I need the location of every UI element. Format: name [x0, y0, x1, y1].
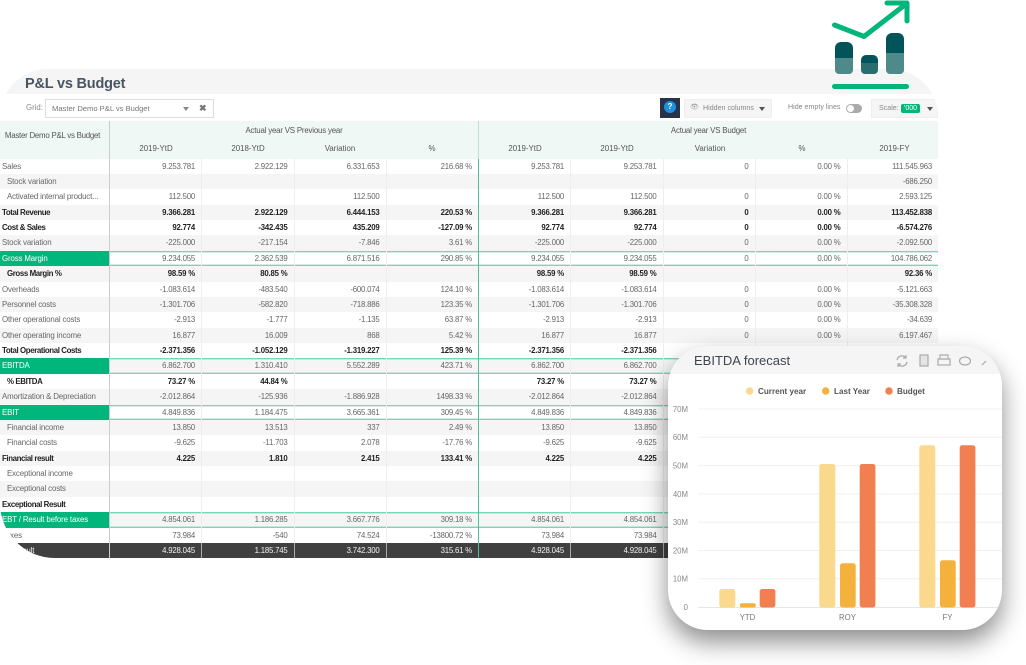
- table body: 92.774: [172, 223, 195, 232]
- table body: -225.000: [166, 238, 195, 247]
- table body: 2.078: [361, 438, 380, 447]
- table body: 9.234.055: [162, 254, 195, 263]
- icon: rising bar chart with arrow: [832, 0, 910, 89]
- table body: -2.913: [174, 315, 195, 324]
- table body: Cost & Sales: [2, 223, 45, 232]
- table body: -127.09 %: [438, 223, 472, 232]
- table body: 4.225: [638, 454, 656, 463]
- table body: 290.85 %: [441, 254, 472, 263]
- table body: 0: [744, 192, 748, 201]
- table body: Exceptional Result: [2, 500, 65, 509]
- table body: -1.083.614: [529, 284, 564, 294]
- table body: 104.786.062: [891, 254, 932, 263]
- table body: 0.00 %: [817, 254, 840, 263]
- table body: 9.234.055: [531, 254, 564, 263]
- table body: 3.667.776: [347, 515, 380, 524]
- table body: EBT / Result before taxes: [2, 515, 88, 524]
- table body: -600.074: [350, 284, 380, 294]
- table body: 9.253.781: [162, 162, 195, 170]
- table body: -9.625: [174, 438, 195, 447]
- x axis labels: YTD: [740, 613, 756, 622]
- table body: 1.810: [269, 454, 288, 463]
- table header: 2019-YtD: [600, 144, 634, 153]
- header icons: [896, 354, 986, 367]
- table body: 73.27 %: [168, 377, 195, 386]
- table header: Variation: [695, 144, 725, 153]
- table body: Stock variation: [2, 238, 52, 247]
- y axis labels: [673, 405, 689, 612]
- table body: 73.984: [634, 530, 656, 540]
- legend: Budget: [897, 387, 925, 396]
- table body: 6.862.700: [531, 361, 564, 370]
- table body: 0: [744, 254, 748, 263]
- x axis labels: FY: [943, 613, 953, 622]
- table body: 0: [744, 238, 748, 247]
- y axis labels: 0: [684, 603, 689, 612]
- table body: -2.012.864: [621, 392, 656, 401]
- table body: -1.886.928: [344, 392, 380, 401]
- table body: 63.87 %: [445, 315, 472, 324]
- table body: -1.777: [267, 315, 288, 324]
- grid selector: [26, 99, 214, 118]
- table header: Actual year VS Previous year: [245, 126, 343, 135]
- table body: 0: [744, 284, 748, 294]
- table body: 4.854.061: [624, 515, 656, 524]
- scale selector: '000: [904, 105, 917, 112]
- table header: 2018-YtD: [231, 144, 265, 153]
- help icon: [660, 98, 680, 118]
- table body: 13.850: [541, 423, 564, 432]
- table body: 13.850: [172, 423, 195, 432]
- table body: 1498.33 %: [437, 392, 472, 401]
- table body: 4.849.836: [624, 408, 656, 416]
- hidden columns button: Hidden columns: [703, 104, 754, 112]
- table body: -11.703: [263, 438, 288, 447]
- y axis labels: 40M: [673, 490, 688, 499]
- y axis labels: 50M: [673, 462, 688, 470]
- table body: 0: [744, 208, 748, 217]
- table body: 6.331.653: [347, 162, 380, 170]
- table body: 16.877: [634, 331, 656, 340]
- table body: 0: [744, 331, 748, 340]
- x axis labels: ROY: [839, 613, 857, 622]
- table body: 4.854.061: [531, 515, 564, 524]
- table body: 4.928.045: [162, 546, 195, 555]
- hidden columns button: [684, 99, 772, 118]
- table body: 4.849.836: [531, 408, 564, 416]
- table body: Financial costs: [7, 438, 57, 447]
- table body: -5.121.663: [897, 284, 932, 294]
- table header: [0, 121, 938, 158]
- help icon: ?: [668, 102, 672, 111]
- table body: -2.371.356: [160, 346, 195, 355]
- table body: 112.500: [630, 192, 656, 201]
- table body: 73.27 %: [629, 377, 656, 386]
- hidden columns button: 👁: [690, 104, 699, 111]
- table body: 16.009: [265, 331, 288, 340]
- table body: 0.00 %: [817, 315, 840, 324]
- table body: -1.301.706: [529, 300, 564, 309]
- table body: 4.928.045: [531, 546, 564, 555]
- table body: 1.184.475: [255, 408, 288, 416]
- table body: 4.849.836: [162, 408, 195, 416]
- table header: Master Demo P&L vs Budget: [5, 131, 100, 140]
- table body: -225.000: [627, 238, 656, 247]
- table body: 9.366.281: [162, 208, 195, 217]
- table body: -17.76 %: [442, 438, 472, 447]
- table body: 92.36 %: [905, 269, 932, 278]
- panel: EBITDA forecast chart card: [668, 346, 1002, 630]
- table body: Other operating income: [2, 331, 81, 340]
- table body: -34.639: [907, 315, 932, 324]
- table body: -483.540: [258, 284, 288, 294]
- table body: -2.092.500: [897, 238, 932, 247]
- table body: 2.922.129: [255, 208, 288, 217]
- table body: 16.877: [541, 331, 564, 340]
- table body: [0, 159, 938, 558]
- table body: 133.41 %: [441, 454, 472, 463]
- table body: 2.362.539: [255, 254, 288, 263]
- bars: [719, 445, 975, 608]
- table body: Sales: [2, 162, 21, 170]
- table body: Taxes: [2, 530, 22, 540]
- table body: 4.225: [176, 454, 195, 463]
- table body: 111.545.963: [892, 162, 932, 170]
- table header: 2019-YtD: [139, 144, 173, 153]
- table body: 2.922.129: [255, 162, 288, 170]
- table body: 9.234.055: [624, 254, 656, 263]
- table body: 92.774: [634, 223, 656, 232]
- table body: EBITDA: [2, 361, 30, 370]
- table body: -2.012.864: [529, 392, 564, 401]
- table body: 0.00 %: [817, 162, 840, 170]
- table body: -9.625: [636, 438, 656, 447]
- table body: -125.936: [258, 392, 288, 401]
- table header: Variation: [325, 144, 355, 153]
- table body: Stock variation: [7, 177, 57, 186]
- table body: 112.500: [169, 192, 195, 201]
- table body: Gross Margin: [2, 254, 48, 263]
- table body: 0.00 %: [817, 331, 840, 340]
- table body: 5.42 %: [449, 331, 472, 340]
- title bar: P&L vs Budget: [25, 76, 125, 92]
- table body: 74.524: [357, 530, 380, 540]
- table body: -1.319.227: [344, 346, 380, 355]
- table body: Exceptional costs: [7, 484, 66, 493]
- table body: 6.197.467: [899, 331, 932, 340]
- table body: 73.984: [541, 530, 564, 540]
- table header: %: [428, 144, 436, 153]
- table body: -2.913: [636, 315, 656, 324]
- column chart: [673, 387, 1002, 622]
- table body: 0.00 %: [817, 192, 840, 201]
- table body: -718.886: [350, 300, 380, 309]
- table body: Gross Margin %: [7, 269, 61, 278]
- table body: 13.850: [634, 423, 656, 432]
- table body: 98.59 %: [168, 269, 195, 278]
- table body: % EBITDA: [7, 377, 42, 386]
- table body: Financial result: [2, 454, 53, 463]
- table body: Overheads: [2, 284, 39, 294]
- table body: 98.59 %: [537, 269, 564, 278]
- table body: 2.593.125: [899, 192, 932, 201]
- table body: 9.366.281: [624, 208, 656, 217]
- table body: 6.862.700: [162, 361, 195, 370]
- table body: 98.59 %: [629, 269, 656, 278]
- table body: 44.84 %: [260, 377, 288, 386]
- table body: -1.301.706: [621, 300, 656, 309]
- table body: 6.444.153: [347, 208, 380, 217]
- table body: 3.742.300: [347, 546, 380, 555]
- y axis labels: 30M: [673, 518, 688, 527]
- y axis labels: 10M: [673, 574, 688, 584]
- table body: EBIT: [2, 408, 19, 416]
- table body: 0.00 %: [817, 284, 840, 294]
- table body: 13.513: [265, 423, 288, 432]
- grid selector: Grid:: [26, 103, 43, 112]
- table body: 3.61 %: [449, 238, 472, 247]
- table body: 0.00 %: [817, 238, 840, 247]
- table body: Total Operational Costs: [2, 346, 81, 355]
- table body: -13800.72 %: [430, 530, 472, 540]
- table body: 220.53 %: [441, 208, 472, 217]
- table body: Exceptional income: [7, 469, 73, 478]
- table body: 309.45 %: [441, 408, 472, 416]
- table body: -2.371.356: [529, 346, 564, 355]
- table body: -2.371.356: [621, 346, 656, 355]
- x axis labels: [740, 613, 953, 622]
- table body: -582.820: [258, 300, 288, 309]
- table body: Amortization & Depreciation: [2, 392, 96, 401]
- table body: 5.552.289: [347, 361, 380, 370]
- table body: 0: [744, 300, 748, 309]
- table body: 123.35 %: [441, 300, 472, 309]
- table body: 1.310.410: [255, 361, 288, 370]
- table body: 9.366.281: [531, 208, 564, 217]
- table body: 435.209: [353, 223, 380, 232]
- table body: 112.500: [538, 192, 564, 201]
- table body: -217.154: [258, 238, 288, 247]
- y axis labels: 60M: [673, 433, 688, 442]
- table body: 868: [367, 331, 380, 340]
- table body: 337: [367, 423, 380, 432]
- table body: 73.984: [172, 530, 195, 540]
- table body: 80.85 %: [260, 269, 288, 278]
- y axis labels: 20M: [673, 546, 688, 556]
- scale selector: [871, 99, 938, 118]
- table body: 2.415: [361, 454, 380, 463]
- table body: -9.625: [543, 438, 564, 447]
- table header: Actual year VS Budget: [671, 126, 746, 135]
- table body: -225.000: [535, 238, 564, 247]
- table body: -342.435: [258, 223, 288, 232]
- table header: 2019-FY: [879, 144, 910, 153]
- table body: -686.250: [903, 177, 932, 186]
- table body: -1.052.129: [252, 346, 288, 355]
- table body: 0.00 %: [817, 223, 840, 232]
- table body: 73.27 %: [537, 377, 564, 386]
- table body: 3.665.361: [347, 408, 380, 416]
- table body: 9.253.781: [624, 162, 656, 170]
- table body: 423.71 %: [441, 361, 472, 370]
- table body: -2.012.864: [160, 392, 195, 401]
- table body: 6.871.516: [347, 254, 380, 263]
- table header: 2019-YtD: [508, 144, 542, 153]
- chart header: [668, 346, 1002, 374]
- legend: Current year: [758, 387, 807, 396]
- table body: -1.135: [359, 315, 380, 324]
- table body: -1.083.614: [160, 284, 195, 294]
- table body: 113.452.838: [891, 208, 932, 217]
- grid selector: ✖: [199, 103, 207, 113]
- table body: 309.18 %: [441, 515, 472, 524]
- table body: 0.00 %: [817, 300, 840, 309]
- title bar: [0, 69, 938, 94]
- table body: 92.774: [541, 223, 564, 232]
- table body: -1.083.614: [621, 284, 656, 294]
- table body: 4.225: [545, 454, 564, 463]
- table body: 0.00 %: [817, 208, 840, 217]
- table body: Financial income: [7, 423, 64, 432]
- table body: 125.39 %: [441, 346, 472, 355]
- table body: Other operational costs: [2, 315, 80, 324]
- panel: P&L vs Budget table: [0, 69, 938, 558]
- legend: Last Year: [834, 387, 871, 396]
- table body: 112.500: [353, 192, 380, 201]
- table body: -35.308.328: [893, 300, 932, 309]
- hide empty lines toggle: Hide empty lines: [788, 103, 840, 111]
- table body: 0: [744, 315, 748, 324]
- chart header: EBITDA forecast: [694, 353, 790, 368]
- grid selector: Master Demo P&L vs Budget: [52, 104, 150, 113]
- table body: 9.253.781: [531, 162, 564, 170]
- table body: 0: [744, 162, 748, 170]
- table body: 0: [744, 223, 748, 232]
- table body: 4.928.045: [624, 546, 656, 555]
- table body: Activated internal product...: [7, 192, 98, 201]
- table body: -7.846: [359, 238, 380, 247]
- table body: -6.574.276: [897, 223, 932, 232]
- table body: Personnel costs: [2, 300, 56, 309]
- scale selector: Scale:: [879, 104, 899, 112]
- legend: [746, 387, 925, 396]
- table body: 4.854.061: [162, 515, 195, 524]
- table body: 1.185.745: [255, 546, 288, 555]
- table body: 216.68 %: [441, 162, 472, 170]
- table body: -540: [273, 530, 288, 540]
- table body: 16.877: [172, 331, 195, 340]
- table body: Total Revenue: [2, 208, 50, 217]
- table header: %: [798, 144, 806, 153]
- table body: 2.49 %: [449, 423, 472, 432]
- table body: 315.61 %: [441, 546, 472, 555]
- table body: -1.301.706: [160, 300, 195, 309]
- table body: 1.186.285: [255, 515, 288, 524]
- table body: Net result: [2, 546, 34, 555]
- hide empty lines toggle: [788, 103, 862, 113]
- y axis labels: 70M: [673, 405, 688, 414]
- table body: 124.10 %: [441, 284, 472, 294]
- table body: 6.862.700: [624, 361, 656, 370]
- table body: -2.913: [543, 315, 564, 324]
